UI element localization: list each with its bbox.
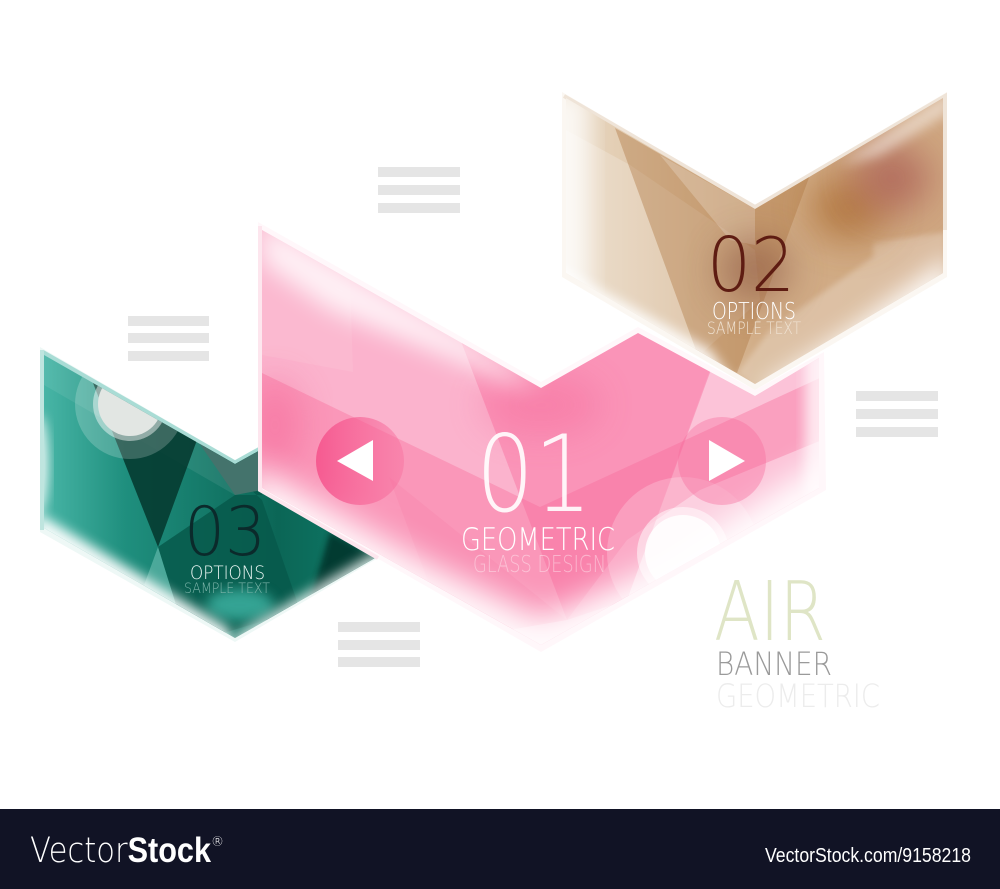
number 01: 01 [476,413,592,536]
text lines: bottom [338,622,420,667]
label: options: OPTIONS [712,299,796,325]
text lines: top [378,167,460,213]
text lines: left [128,316,209,361]
footer image id: VectorStock.com/9158218 [765,845,971,867]
panel: teal arrow 03 [40,347,376,642]
title block: air banner geometric: GEOMETRIC [716,677,880,715]
decorative circles [607,477,743,592]
number 03: 03 [184,493,266,572]
label: sample text: SAMPLE TEXT [707,319,801,339]
registered mark: ® [211,835,224,850]
label: options: OPTIONS [190,562,265,584]
title block: air banner geometric: AIR [714,565,826,660]
title block: air banner geometric [714,565,880,715]
label: sample text: SAMPLE TEXT [184,581,270,597]
panel: pink arrow 01 [258,226,819,645]
button: next [678,417,766,505]
footer bar [0,809,1000,889]
button: previous [316,417,404,505]
panel: brown arrow 02 [540,90,950,400]
decorative circles [75,377,178,459]
title block: air banner geometric: BANNER [716,645,832,683]
label: geometric: GEOMETRIC [461,522,615,558]
number 02: 02 [707,221,795,309]
label: glass design: GLASS DESIGN [473,552,606,578]
text lines: right [856,391,938,437]
footer logo: VectorStock [30,831,211,871]
